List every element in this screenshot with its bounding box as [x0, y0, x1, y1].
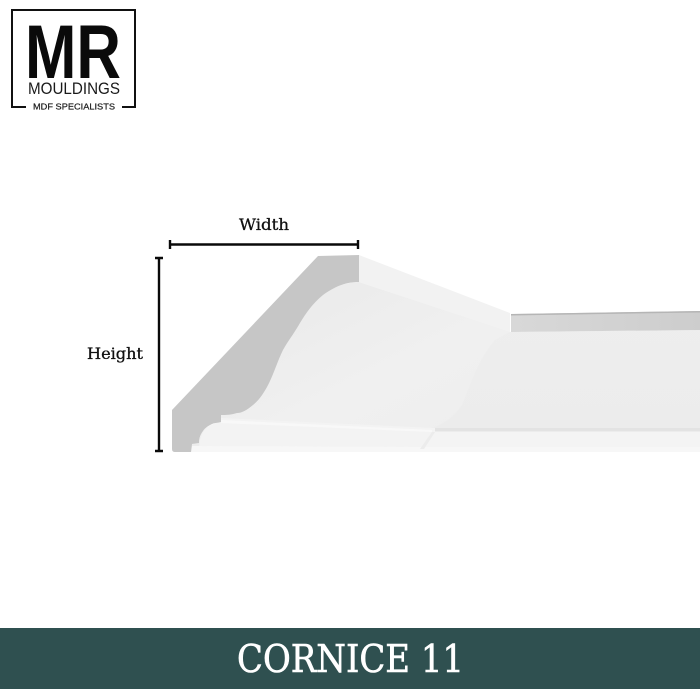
height label: Height	[87, 344, 144, 363]
title: CORNICE 11	[237, 637, 464, 681]
width label: Width	[239, 215, 289, 234]
cornice moulding	[172, 255, 700, 452]
moulding front face	[221, 282, 510, 428]
moulding lower bands	[199, 418, 435, 449]
cut profile	[172, 255, 359, 452]
logo: MR Mouldings	[12, 10, 135, 112]
logo word MOULDINGS: MOULDINGS	[28, 79, 120, 98]
rear strip	[511, 311, 700, 332]
moulding top face	[359, 255, 510, 332]
title band	[0, 628, 700, 689]
moulding base	[191, 282, 700, 452]
logo tagline: MDF SPECIALISTS	[33, 102, 115, 112]
width dimension arrow	[170, 240, 358, 249]
logo frame	[12, 10, 135, 107]
logo letters MR: MR	[25, 10, 121, 95]
height dimension arrow	[155, 258, 163, 451]
